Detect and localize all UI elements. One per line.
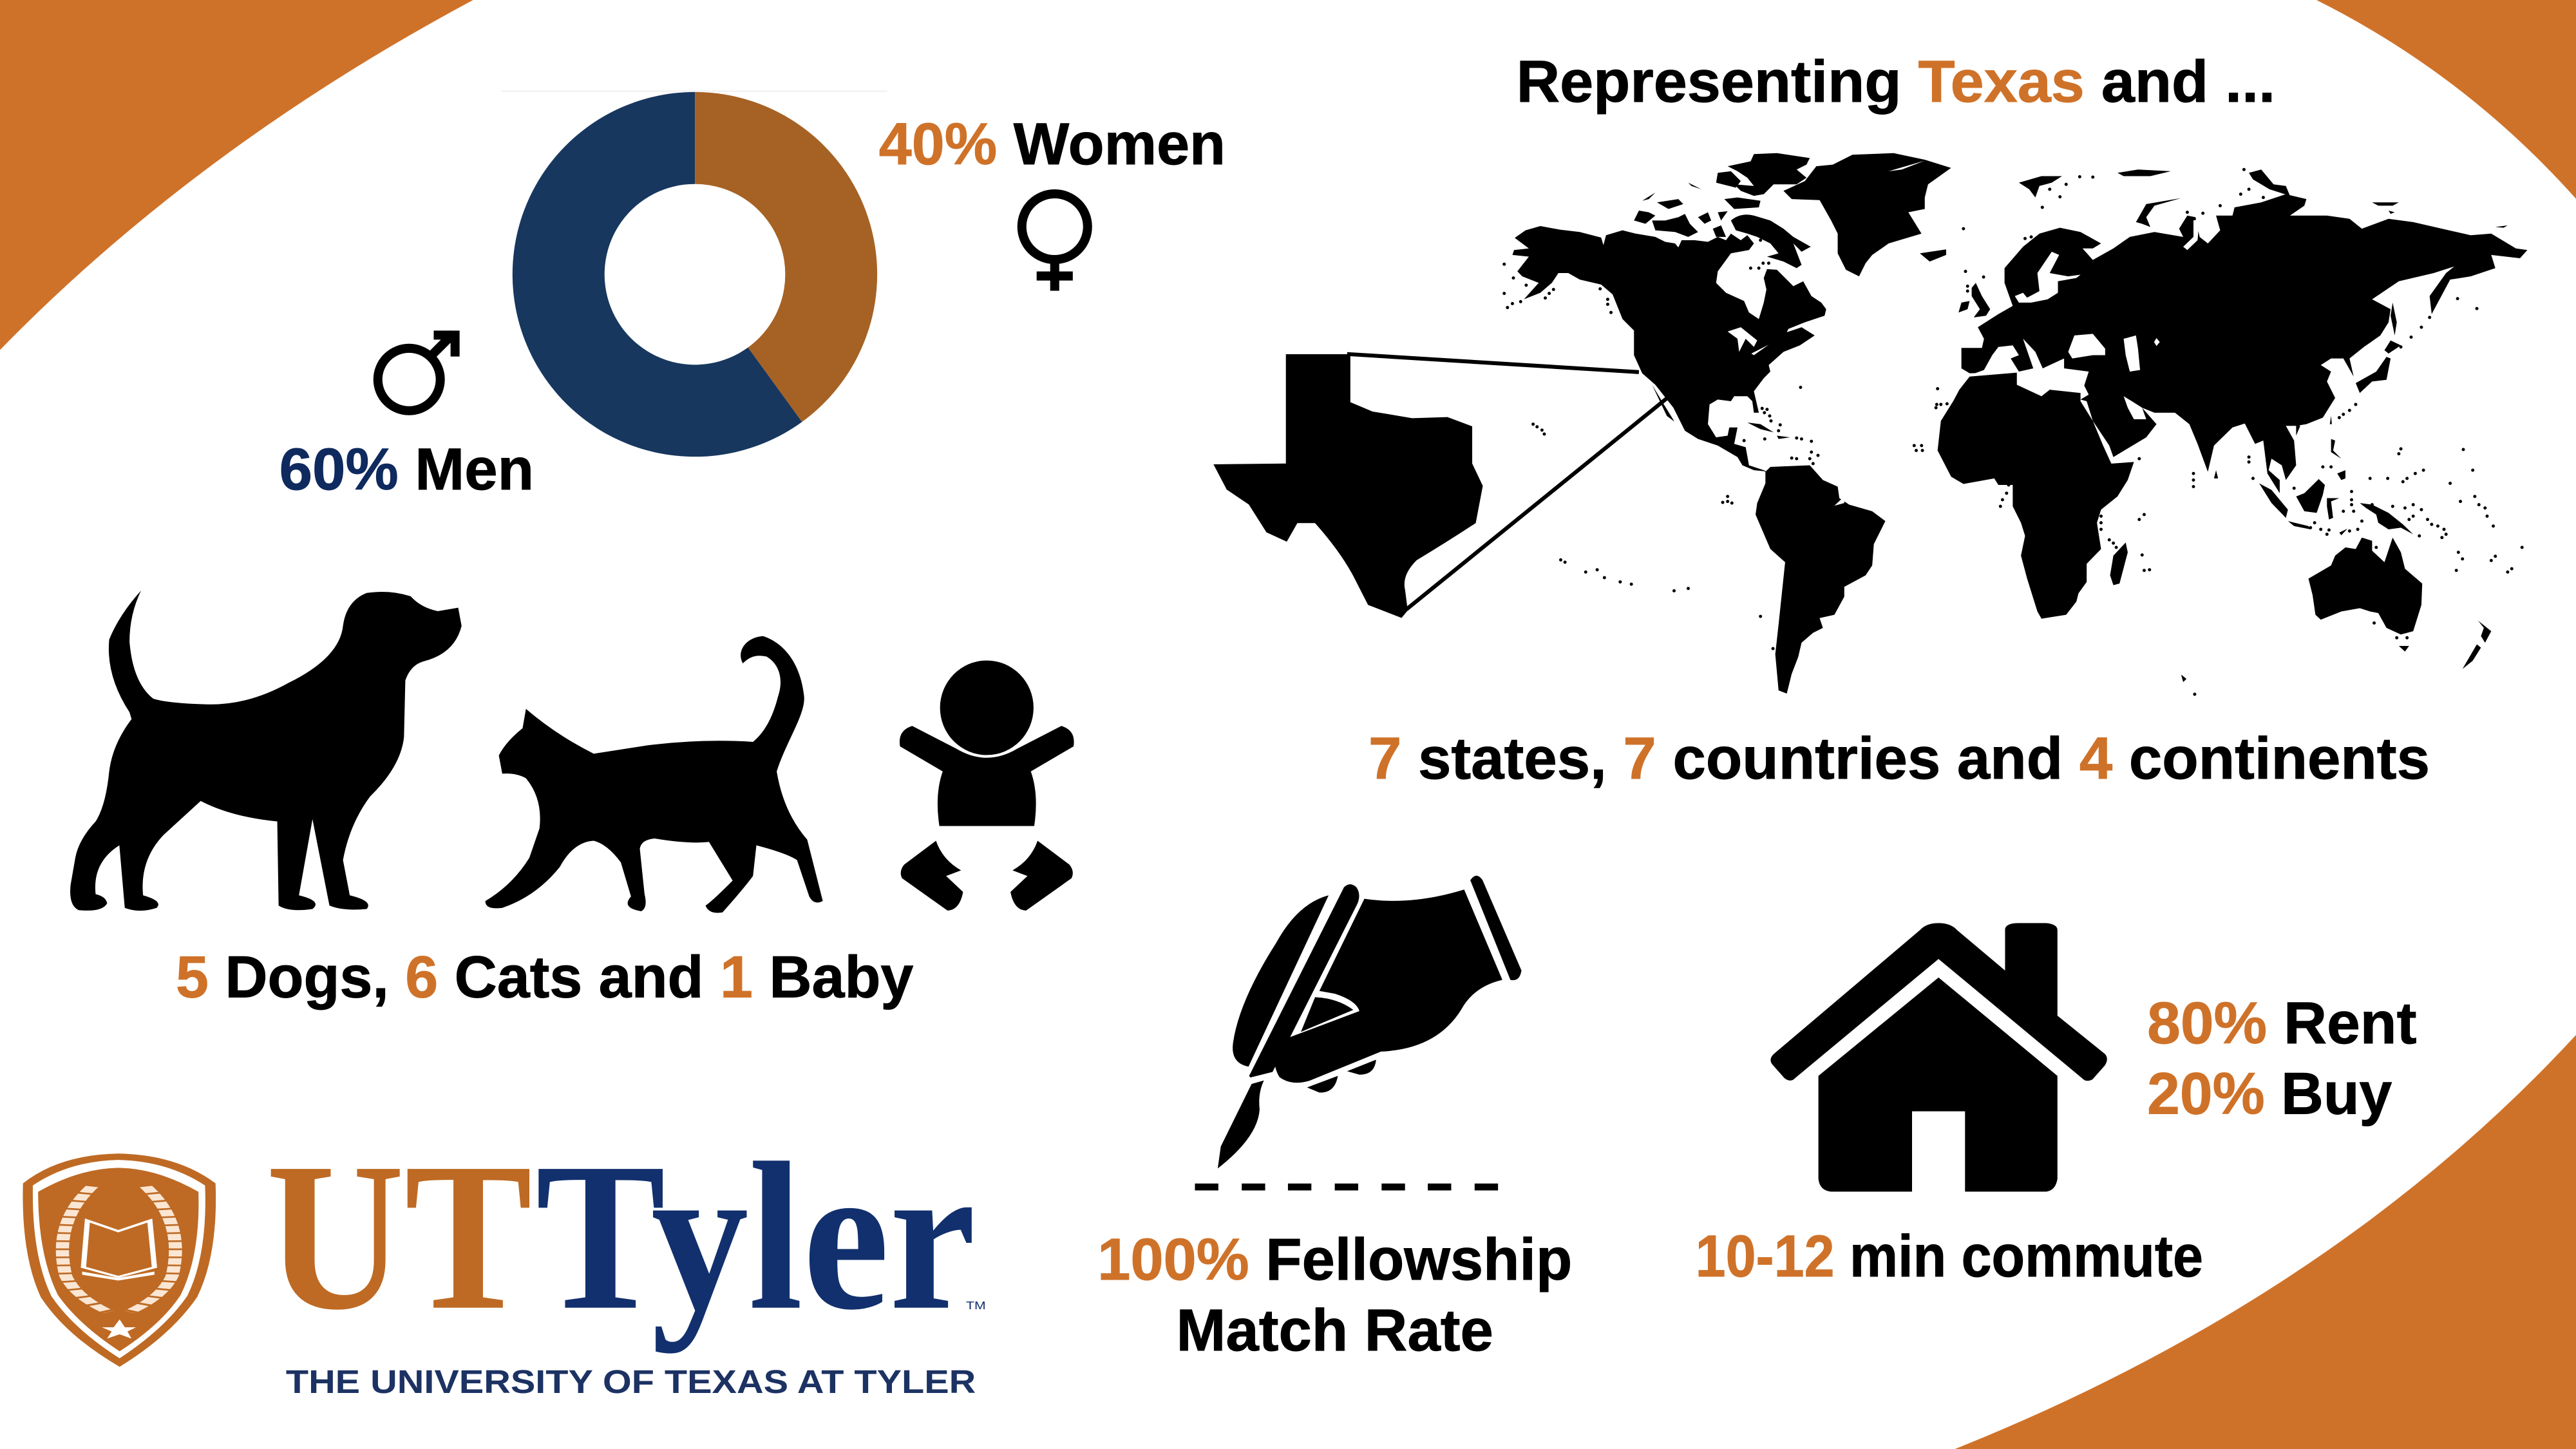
donut chart: gender split: [513, 92, 877, 457]
Arctic islands: [2019, 169, 2508, 228]
logo shield: [23, 1153, 216, 1367]
label: 40% Women: 40% Women: [879, 111, 1226, 177]
icon: cat: [486, 636, 823, 913]
southern islands: [2181, 674, 2186, 682]
Eurasia, Africa, Oceania: [1914, 169, 2527, 694]
logo tagline: THE UNIVERSITY OF TEXAS AT TYLER: [286, 1363, 976, 1400]
Iceland: [1920, 249, 1946, 261]
small islands east: [1914, 169, 2522, 694]
Eurasia: [1962, 194, 2527, 493]
icon: female symbol: [1022, 194, 1088, 291]
small islands west: [1504, 235, 1818, 649]
label: fellowship match rate: 100% Fellowship: [1097, 1227, 1572, 1293]
Canadian Arctic islands: [1634, 153, 1811, 268]
logo: UT Tyler: [23, 1120, 986, 1400]
icon: baby: [900, 661, 1074, 911]
logo: UT Tyler: TM: [966, 1299, 986, 1312]
Americas and Greenland: [1504, 153, 1951, 694]
Australia: [2309, 538, 2422, 634]
Britain and Ireland: [1958, 283, 1990, 317]
caption: states, countries, continents: 7 states, 7 countries and 4 continents: [1368, 726, 2430, 791]
Africa: [1938, 373, 2134, 619]
South America: [1756, 465, 1886, 694]
Philippines and Indonesia: [2214, 439, 2413, 535]
icon: male symbol: [378, 334, 455, 411]
label: 20% Buy: 20% Buy: [2147, 1061, 2392, 1127]
label: fellowship match rate: Match Rate: [1177, 1298, 1493, 1363]
donut slice: men 60%: [513, 92, 802, 457]
Texas silhouette: [1213, 354, 1482, 618]
Baja California: [1652, 384, 1674, 422]
connector lines: [1347, 354, 1671, 609]
background: orange corner top right: [2316, 0, 2576, 199]
seas cutouts: [1971, 219, 2200, 419]
Texas enlargement: [1213, 354, 1671, 618]
icon: house: [1770, 923, 2107, 1191]
heading: Representing Texas: Representing Texas and ...: [1517, 49, 2275, 115]
label: 80% Rent: 80% Rent: [2147, 990, 2417, 1056]
icon: dog: [70, 591, 462, 911]
donut slice: women 40%: [695, 92, 877, 422]
logo wordmark: UT: [266, 1120, 533, 1354]
logo: UT Tyler: Tyler: [536, 1120, 976, 1354]
background: orange corner top left: [0, 0, 473, 350]
Tasmania: [2399, 646, 2409, 652]
background: orange corner bottom right: [1955, 1035, 2576, 1449]
Madagascar: [2110, 542, 2128, 585]
label: commute: 10-12 min commute: [1696, 1224, 2203, 1289]
pets and baby icons: [70, 591, 1074, 913]
icon: hand writing with pen: [1195, 876, 1521, 1191]
New Zealand: [2463, 621, 2491, 669]
Greenland: [1783, 153, 1951, 276]
Japan, Sakhalin, East Asia islands: [2296, 303, 2401, 436]
world map: [1504, 153, 2527, 694]
North America: [1512, 226, 1826, 473]
Great Lakes: [1728, 327, 1768, 355]
caption: dogs, cats, baby: 5 Dogs, 6 Cats and 1 Baby: [176, 944, 913, 1010]
label: 60% Men: 60% Men: [279, 437, 534, 502]
label: fellowship match rate: [1097, 1227, 1572, 1363]
Cuba and Hispaniola: [1747, 422, 1790, 439]
